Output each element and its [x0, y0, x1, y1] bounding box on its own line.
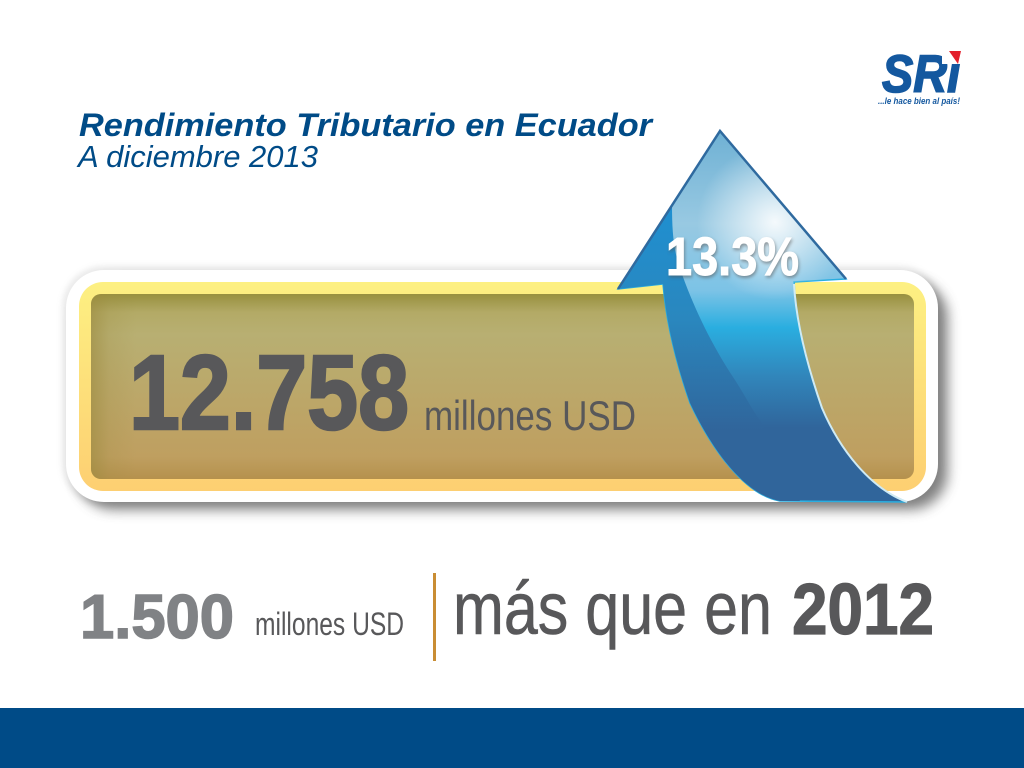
comparison year: 2012 [792, 570, 934, 650]
title: Rendimiento Tributario en Ecuador [79, 107, 654, 143]
comparison text: más que en [453, 567, 772, 650]
difference unit: millones USD [255, 606, 404, 642]
subtitle: A diciembre 2013 [76, 139, 318, 174]
title block [76, 107, 654, 174]
comparison line [80, 567, 934, 661]
main number: 12.758 [129, 334, 409, 452]
arrow percentage: 13.3% [667, 229, 800, 289]
panel: main figure card [62, 266, 948, 510]
arrow: growth 13.3% [618, 131, 907, 502]
icon: SRI logo: ...le hace bien al país! [878, 96, 960, 107]
main unit: millones USD [424, 392, 636, 439]
difference number: 1.500 [80, 583, 234, 652]
arrow: growth 13.3%: 13.3% [666, 227, 799, 287]
icon: SRI logo: SRI [882, 45, 961, 104]
footer band [0, 708, 1024, 768]
